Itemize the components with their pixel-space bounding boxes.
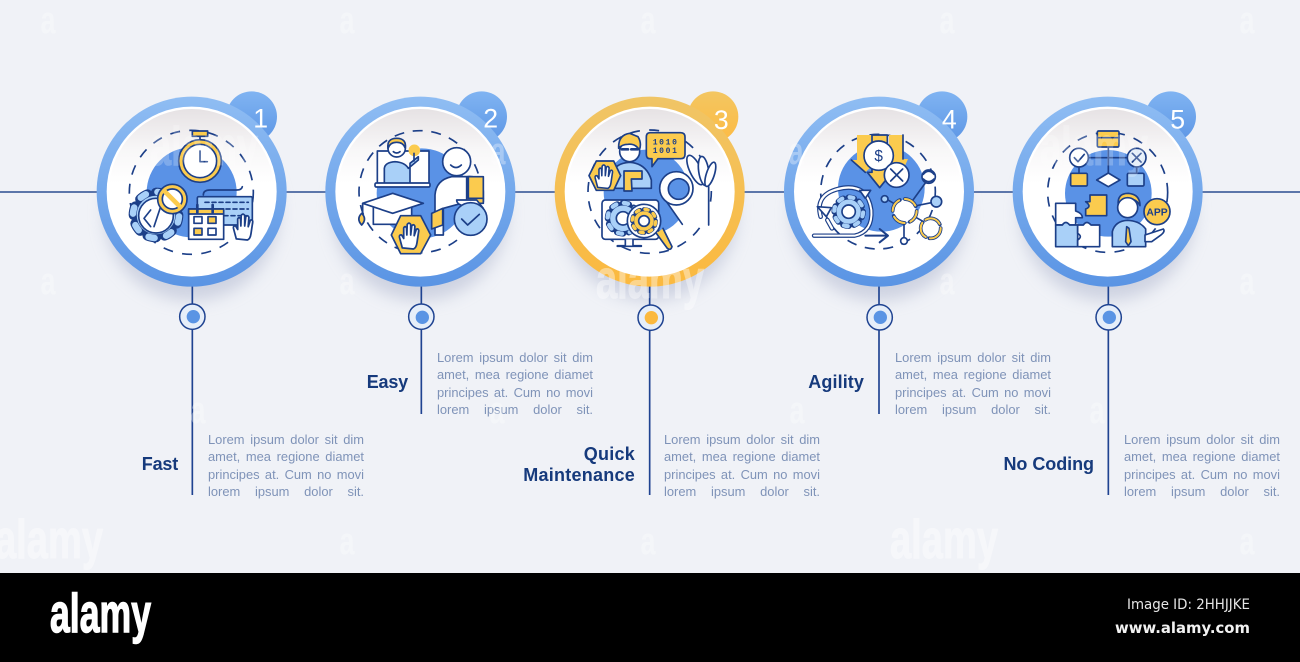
watermarks: a [940,0,955,42]
step 3: Quick Maintenance [523,91,820,499]
text block: No Coding [1124,432,1280,499]
text block: Fast: principes at. Cum no movi [208,467,364,482]
heading: Agility: Agility [808,372,864,392]
text block: No Coding: amet, mea regione diamet [1124,449,1280,464]
footer bar with logo and image id: alamy [50,582,151,644]
circle with icon: quick maintenance: 1001 [653,147,679,156]
watermarks: a [490,390,505,432]
watermarks: a [1240,261,1255,303]
text block: Quick Maintenance: amet, mea regione diamet [664,449,820,464]
text block: No Coding: Lorem ipsum dolor sit dim [1124,432,1280,447]
watermarks: a [340,521,355,563]
text block: Agility [895,350,1051,417]
heading: No Coding: No Coding [1003,454,1094,474]
text block: Easy: lorem ipsum dolor sit. [437,402,593,417]
watermarks: a [1240,0,1255,42]
footer bar with logo and image id [0,573,1300,662]
watermarks: a [490,131,506,173]
heading: Fast: Fast [142,454,178,474]
step 5: No Coding [1003,91,1280,499]
watermarks: a [40,0,56,42]
watermarks: a [340,261,355,303]
watermarks: alamy [1040,115,1148,177]
step 4: Agility [784,91,1051,417]
watermarks: a [940,261,955,303]
step 1: Fast [96,91,364,499]
circle with icon: easy: 2 [483,104,498,134]
heading: Quick Maintenance [523,444,635,485]
text block: Easy: Lorem ipsum dolor sit dim [437,350,593,365]
watermarks: a [788,131,804,173]
text block: Fast [208,432,364,499]
circle with icon: no coding: 5 [1170,104,1185,134]
watermarks: a [340,0,355,42]
circle with icon: quick maintenance: 1010 [653,138,679,147]
heading: Quick Maintenance: Quick [584,444,635,464]
text block: Easy: principes at. Cum no movi [437,385,593,400]
footer bar with logo and image id: Image ID: 2HHJJKE [1127,597,1250,613]
text block: Agility: amet, mea regione diamet [895,367,1051,382]
circle with icon: quick maintenance: 3 [714,105,729,135]
circle with icon: fast: 1 [253,104,268,134]
text block: Easy: amet, mea regione diamet [437,367,593,382]
watermarks: a [1240,521,1255,563]
text block: Fast: lorem ipsum dolor sit. [208,484,364,499]
text block: Quick Maintenance: principes at. Cum no movi [664,467,820,482]
text block: Agility: lorem ipsum dolor sit. [895,402,1051,417]
heading: Quick Maintenance: Maintenance [523,465,635,485]
watermarks: alamy [890,508,998,570]
watermarks: a [640,521,656,563]
heading: Easy: Easy [367,372,408,392]
watermarks: alamy [596,248,704,310]
text block: Quick Maintenance: Lorem ipsum dolor sit dim [664,432,820,447]
watermarks: a [1090,390,1105,432]
text block: Fast: amet, mea regione diamet [208,449,364,464]
watermarks: a [190,390,206,432]
circle with icon: agility [784,91,974,414]
text block: Agility: Lorem ipsum dolor sit dim [895,350,1051,365]
text block: Agility: principes at. Cum no movi [895,385,1051,400]
text block: No Coding: lorem ipsum dolor sit. [1124,484,1280,499]
circle with icon: agility: 4 [942,104,957,134]
circle with icon: no coding: APP [1146,207,1168,218]
text block: Fast: Lorem ipsum dolor sit dim [208,432,364,447]
circle with icon: agility: $ [874,148,883,165]
watermarks: a [40,261,56,303]
text block: Quick Maintenance: lorem ipsum dolor sit. [664,484,820,499]
watermarks: a [790,390,805,432]
step 2: Easy [325,91,593,417]
circle with icon: quick maintenance [554,91,745,495]
circle with icon: no coding [1012,91,1203,495]
circle with icon: fast [96,91,287,495]
text block: Easy [437,350,593,417]
text block: No Coding: principes at. Cum no movi [1124,467,1280,482]
watermarks: a [640,0,656,42]
circle with icon: easy [325,91,516,414]
text block: Quick Maintenance [664,432,820,499]
footer bar with logo and image id: www.alamy.com [1115,619,1250,637]
watermarks: alamy [150,115,258,177]
